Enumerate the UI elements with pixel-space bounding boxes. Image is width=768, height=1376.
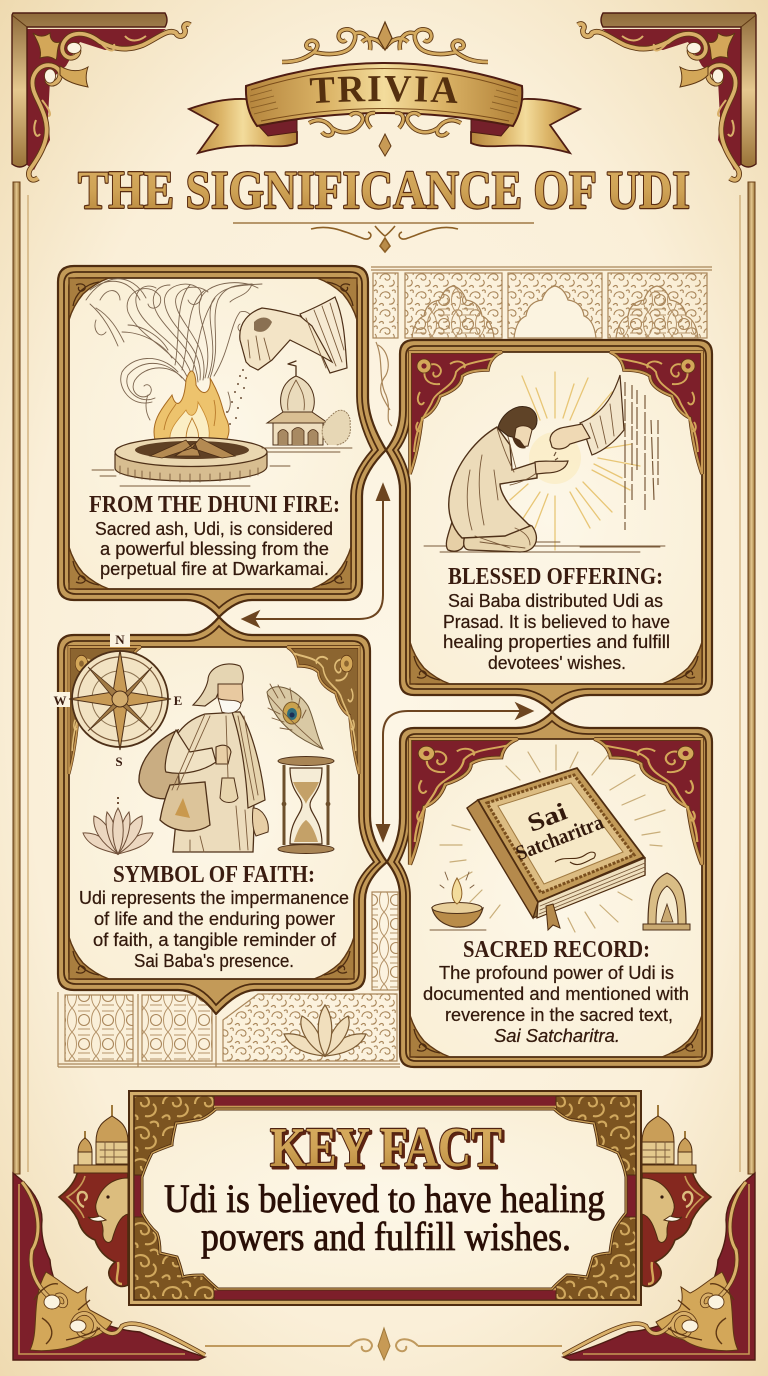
illustration: small shrine [643, 873, 690, 930]
background filigree tiles, upper [371, 267, 712, 426]
ribbon left tail [189, 99, 297, 153]
right temple domes [642, 1105, 696, 1173]
illustration: blessing hand and robe [550, 375, 658, 530]
panel 4 body [423, 962, 689, 1046]
illustration: peacock feather [267, 684, 323, 749]
panel 4 body: documented and mentioned with [423, 983, 689, 1004]
illustration: Sai Baba figure [139, 664, 268, 852]
panel frame 3 [58, 617, 387, 1014]
panel: symbol of faith [50, 617, 387, 1014]
book title: Sai [524, 798, 571, 838]
panel 1 body [95, 518, 333, 579]
panel frame 1 [58, 266, 386, 617]
ribbon folds [257, 118, 511, 136]
compass labels [54, 632, 182, 769]
illustration: rays of light [510, 372, 640, 550]
banner ribbon: TRIVIA [310, 76, 458, 104]
panel 2 body: healing properties and fulfill [443, 631, 670, 652]
illustration: lotus [83, 797, 153, 854]
compass labels: S [115, 754, 123, 769]
compass labels: W [54, 693, 66, 708]
book title: Satcharitra [512, 810, 607, 865]
compass labels: N [115, 632, 125, 647]
panel 2 body: Prasad. It is believed to have [443, 611, 670, 632]
background filigree tiles, lower [58, 892, 400, 1067]
panel 4 body: The profound power of Udi is [439, 962, 674, 983]
illustration: smoke [86, 279, 262, 420]
top filigree above banner [282, 22, 488, 62]
panel 4 heading: SACRED RECORD: [463, 937, 650, 963]
panel 1 body: perpetual fire at Dwarkamai. [100, 558, 329, 579]
key fact frame [129, 1091, 641, 1305]
panel 1 body: a powerful blessing from the [100, 538, 329, 559]
panel: sacred record [387, 712, 712, 1067]
key fact statement [164, 1176, 605, 1259]
panel 3 body: of faith, a tangible reminder of [93, 929, 337, 950]
compass labels: E [174, 693, 182, 708]
panel 3 body: Udi represents the impermanence [79, 887, 349, 908]
banner label [300, 101, 470, 104]
background lotus motif [284, 1005, 366, 1056]
panel 2 body [443, 590, 670, 673]
illustration: stone ring with logs [92, 438, 290, 486]
panel 3 body: of life and the enduring power [94, 908, 335, 929]
filigree below banner [309, 113, 461, 156]
panel 1 body: Sacred ash, Udi, is considered [95, 518, 333, 539]
ribbon right tail [471, 99, 580, 153]
key fact heading shadow: KEY FACT [272, 1119, 504, 1181]
key fact heading: KEY FACT [270, 1117, 502, 1179]
illustration: kneeling devotee [424, 407, 665, 552]
bottom centre ornament [205, 1328, 562, 1360]
top-right page corner [578, 13, 756, 180]
panel frame 2 [386, 340, 712, 712]
illustration: flame [154, 371, 229, 446]
illustration: compass rose [50, 632, 171, 750]
arrow: upward then left to panel 1 [243, 485, 389, 626]
illustration: hand sprinkling ash [240, 297, 347, 373]
bottom-right page corner [563, 1173, 755, 1360]
panel frame 4 [387, 712, 712, 1067]
key fact panel [129, 1091, 641, 1305]
left temple domes [74, 1105, 128, 1173]
illustration: Sai Satcharitra book [467, 768, 645, 930]
banner ribbon [186, 62, 582, 155]
panel 3 body [79, 887, 349, 971]
title divider [233, 223, 534, 252]
panel 1 heading: FROM THE DHUNI FIRE: [89, 492, 340, 518]
panel: from the dhuni fire [58, 266, 386, 617]
bottom-left page corner [13, 1173, 205, 1360]
right elephant medallion [642, 1170, 711, 1286]
arrow: downward and right to panel 4 [377, 704, 532, 840]
panel 3 body: Sai Baba's presence. [134, 950, 294, 971]
left elephant medallion [59, 1170, 128, 1286]
illustration: rays behind book [440, 745, 665, 932]
top-left page corner [12, 13, 190, 180]
panel 2 body: devotees' wishes. [488, 652, 626, 673]
key fact statement: powers and fulfill wishes. [201, 1214, 571, 1259]
ribbon centre [246, 63, 522, 126]
panel 4 body: reverence in the sacred text, [445, 1004, 673, 1025]
panel: blessed offering [386, 340, 712, 712]
illustration: hourglass [278, 756, 334, 854]
panel 4 body: Sai Satcharitra. [494, 1025, 620, 1046]
key fact statement: Udi is believed to have healing [164, 1176, 605, 1221]
outer page frame [13, 182, 755, 1174]
illustration: oil lamp [430, 872, 486, 930]
illustration: falling ash [226, 369, 247, 425]
panel 2 body: Sai Baba distributed Udi as [448, 590, 663, 611]
panel 2 heading: BLESSED OFFERING: [448, 564, 663, 590]
illustration: temple [262, 361, 352, 452]
panel 3 heading: SYMBOL OF FAITH: [113, 862, 315, 888]
